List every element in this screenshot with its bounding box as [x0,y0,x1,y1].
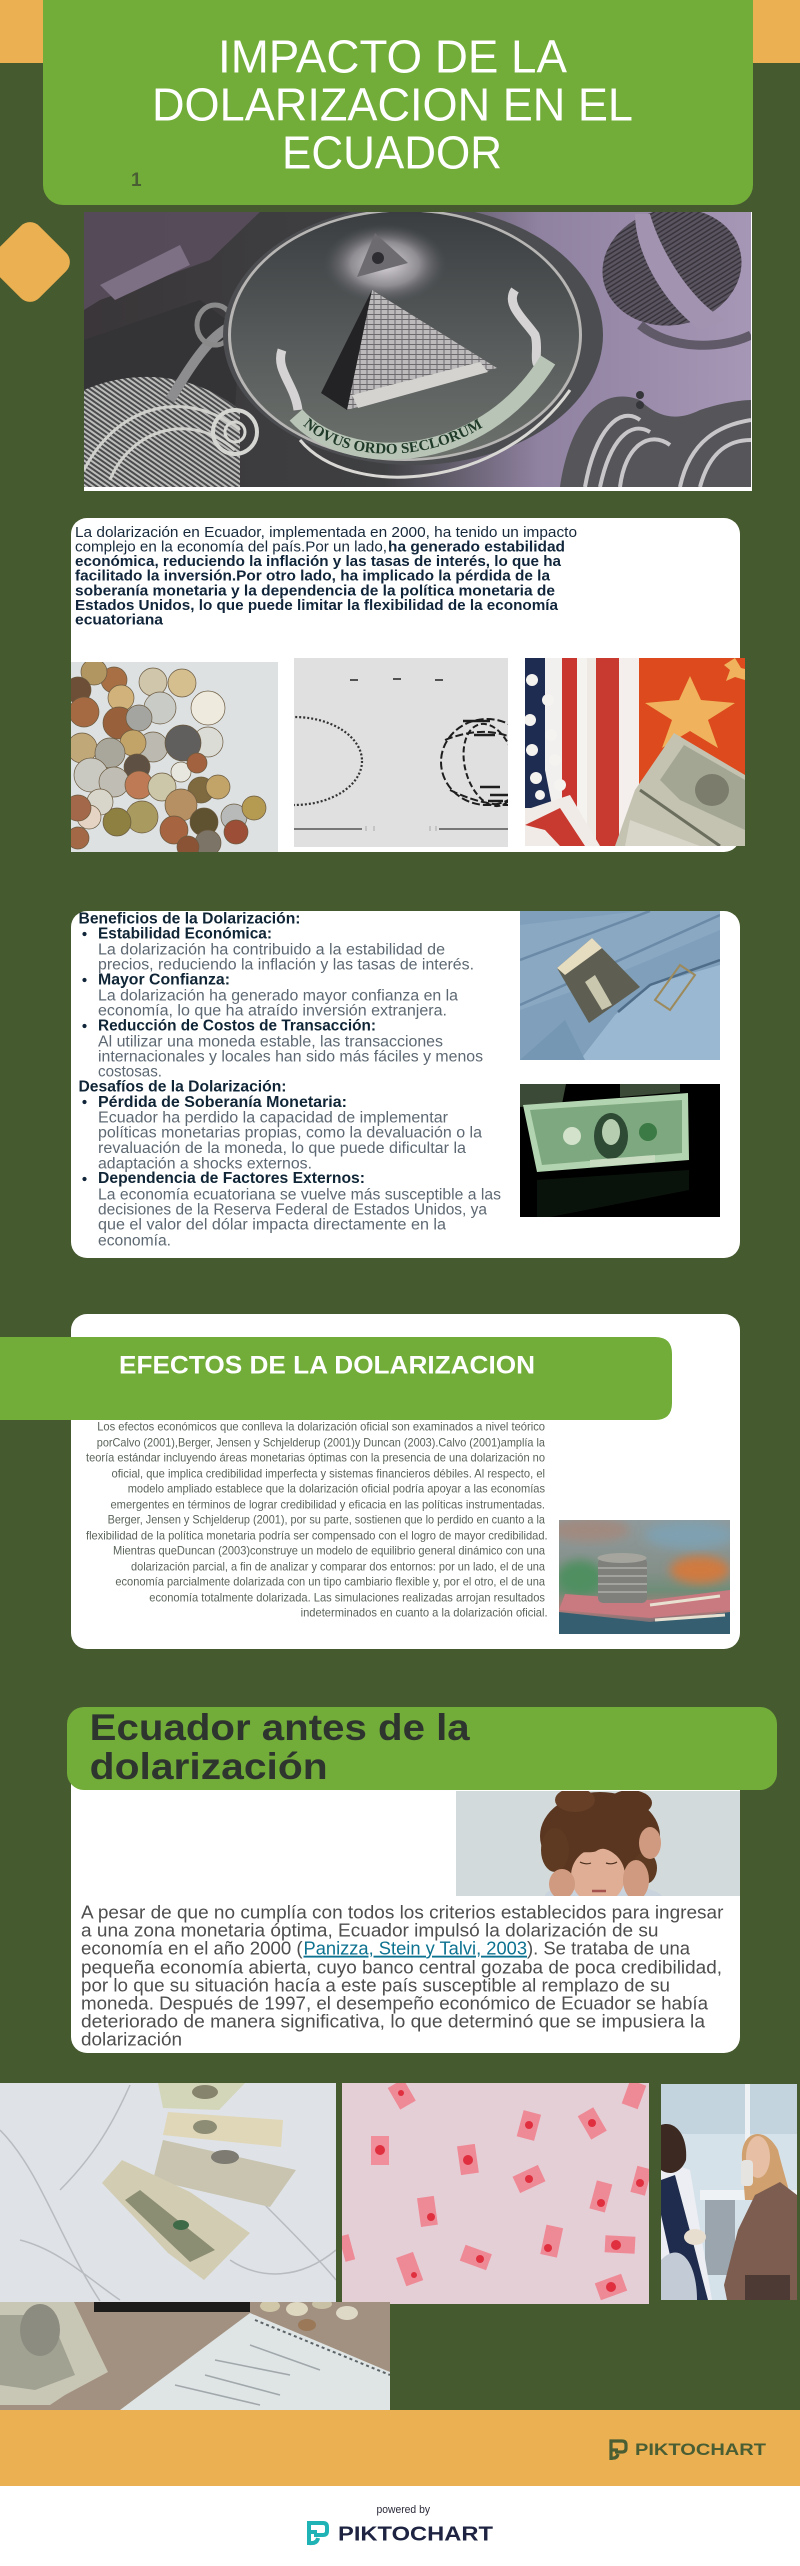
text: challenges: La economía ecuatoriana se vuelve más susceptible a las [98,1186,501,1203]
text: benefits [78,910,483,1081]
history paragraph: dolarización [81,2028,182,2049]
intro paragraph [75,524,577,629]
logo icon [309,2523,327,2545]
history paragraph: ). Se trataba de una [527,1938,691,1959]
intro paragraph: ha generado estabilidad [388,539,565,556]
text: benefits: Reducción de Costos de Transacción: [98,1018,376,1035]
history paragraph: A pesar de que no cumplía con todos los criterios establecidos para ingresar [81,1902,723,1923]
heading banner: EFECTOS DE LA DOLARIZACION [119,1352,535,1380]
effects paragraph: economía totalmente dolarizada. Las simulaciones realizadas arrojan resultados [149,1590,545,1604]
history paragraph: deteriorado de manera significativa, lo que determinó que se impusiera la [81,2010,706,2031]
title: ECUADOR [282,126,502,178]
image: coin stack on banknotes [559,1520,730,1634]
intro paragraph: soberanía monetaria y la dependencia de la política monetaria de [75,582,555,599]
history paragraph: Panizza, Stein y Talvi, 2003 [304,1938,527,1959]
heading banner: Ecuador antes de la [90,1707,470,1748]
effects paragraph [86,1420,548,1620]
text: challenges: Desafíos de la Dolarización: [78,1078,286,1095]
top orange band [0,0,800,63]
image: pink tickets [342,2083,649,2304]
image: people talking [661,2084,797,2300]
text: benefits: La dolarización ha generado mayor confianza en la [98,987,458,1004]
heading banner [67,1707,777,1790]
effects paragraph: Mientras queDuncan (2003)construye un modelo de equilibrio general dinámico con una [113,1544,545,1558]
powered by: powered by [376,2504,430,2516]
footer piktochart logo: PIKTOCHART [635,2440,767,2459]
piktochart wordmark [309,2523,493,2546]
text: challenges: adaptación a shocks externos. [98,1155,312,1172]
image: coins [71,662,278,852]
effects paragraph: teoría estándar incluyendo áreas monetarias óptimas con la presencia de una dolarización no [86,1451,545,1465]
effects paragraph: emergentes en términos de lograr credibilidad y eficacia en las políticas instrumentadas. [110,1498,545,1512]
text: benefits: precios, reduciendo la inflación y las tasas de interés. [98,956,474,973]
title: DOLARIZACION EN EL [152,79,633,131]
intro paragraph: complejo en la economía del país.Por un lado, [75,539,387,556]
image: dollar bill seal [84,212,752,491]
effects paragraph: oficial, que implica credibilidad imperfecta y sistemas financieros débiles. Al respecto, el [112,1467,545,1481]
panel: ecuador antes de la dolarizacion [67,1707,777,2053]
text: benefits: economía, lo que ha atraído inversión extranjera. [98,1002,447,1019]
image: dollars and notebook [0,2302,390,2410]
effects paragraph: flexibilidad de la política monetaria podría ser compensado con el logro de mayor credibilidad. [86,1529,548,1543]
title panel [43,0,753,205]
image: dollar in jeans pocket [520,911,720,1060]
text: challenges: revaluación de la moneda, lo que puede dificultar la [98,1140,466,1157]
piktochart wordmark: PIKTOCHART [338,2524,493,2546]
text: challenges: Pérdida de Soberanía Monetaria: [98,1094,347,1111]
text: benefits: Estabilidad Económica: [98,925,272,942]
intro paragraph: facilitado la inversión.Por otro lado, ha implicado la pérdida de la [75,568,551,585]
footer orange band [0,2410,800,2486]
text: benefits: Mayor Confianza: [98,972,230,989]
logo icon [611,2441,626,2460]
panel: introduction [65,518,745,858]
panel: benefits and challenges [71,910,740,1258]
history paragraph [81,1902,723,2049]
image: dotted globe sketch [294,658,508,847]
title: IMPACTO DE LA [218,31,567,83]
title [152,31,633,178]
text: benefits: La dolarización ha contribuido a la estabilidad de [98,941,445,958]
image: dollar bill seal: NOVUS ORDO SECLORUM [303,418,483,454]
page number: 1 [131,170,142,191]
intro paragraph: ecuatoriana [75,612,164,629]
footer piktochart logo [611,2440,767,2460]
text: benefits: Beneficios de la Dolarización: [78,910,300,927]
text: benefits: internacionales y locales han sido más fáciles y menos [98,1049,483,1066]
heading banner: dolarización [90,1746,328,1787]
history paragraph: por lo que su situación hacía a este país susceptible al remplazo de su [81,1974,670,1995]
effects paragraph: indeterminados en cuanto a la dolarización oficial. [301,1606,548,1620]
history paragraph: economía en el año 2000 ( [81,1938,303,1959]
image: worried woman [456,1791,740,1896]
right oval [591,196,753,338]
intro paragraph: Estados Unidos, lo que puede limitar la flexibilidad de la economía [75,597,559,614]
text: challenges: decisiones de la Reserva Federal de Estados Unidos, ya [98,1202,487,1219]
text: challenges: que el valor del dólar impacta directamente en la [98,1217,446,1234]
text: benefits: costosas. [98,1064,162,1081]
history paragraph: pequeña economía abierta, cuyo banco central gozaba de poca credibilidad, [81,1956,722,1977]
text: benefits: Al utilizar una moneda estable, las transacciones [98,1033,443,1050]
outer scalloped ring [223,205,603,465]
effects paragraph: modelo ampliado establece que la dolarización oficial podría apoyar a las economías [128,1482,545,1496]
image: dollar bill on black [520,1084,720,1217]
intro paragraph: económica, reduciendo la inflación y las tasas de interés, lo que ha [75,553,562,570]
panel: efectos de la dolarizacion [0,1314,740,1649]
heading banner [0,1337,672,1420]
text: challenges [78,1078,501,1250]
effects paragraph: Los efectos económicos que conlleva la dolarización oficial son examinados a nivel teórico [97,1420,545,1434]
text: challenges: economía. [98,1233,171,1250]
effects paragraph: dolarización parcial, a fin de analizar y comparar dos entornos: por un lado, el de una [131,1560,545,1574]
text: challenges: Dependencia de Factores Externos: [98,1170,365,1187]
history paragraph: moneda. Después de 1997, el desempeño económico de Ecuador se había [81,1992,709,2013]
intro paragraph: La dolarización en Ecuador, implementada en 2000, ha tenido un impacto [75,524,577,541]
decorative orange diamond [0,217,75,307]
history paragraph: a una zona monetaria óptima, Ecuador impulsó la dolarización de su [81,1920,658,1941]
effects paragraph: porCalvo (2001),Berger, Jensen y Schjelderup (2001)y Duncan (2003).Calvo (2001)amplía la [97,1436,545,1450]
effects paragraph: Berger, Jensen y Schjelderup (2001), por su parte, sostienen que lo perdido en cuanto a la [108,1513,545,1527]
effects paragraph: economía parcialmente dolarizada con un tipo cambiario flexible y, por el otro, el de una [115,1575,545,1589]
lower right engraving [560,397,751,487]
white footer [0,2486,800,2566]
text: challenges: Ecuador ha perdido la capacidad de implementar [98,1109,448,1126]
image: dollars on marble [0,2083,336,2302]
image: US and China flags with dollars [525,658,745,846]
text: challenges: políticas monetarias propias, como la devaluación o la [98,1124,482,1141]
